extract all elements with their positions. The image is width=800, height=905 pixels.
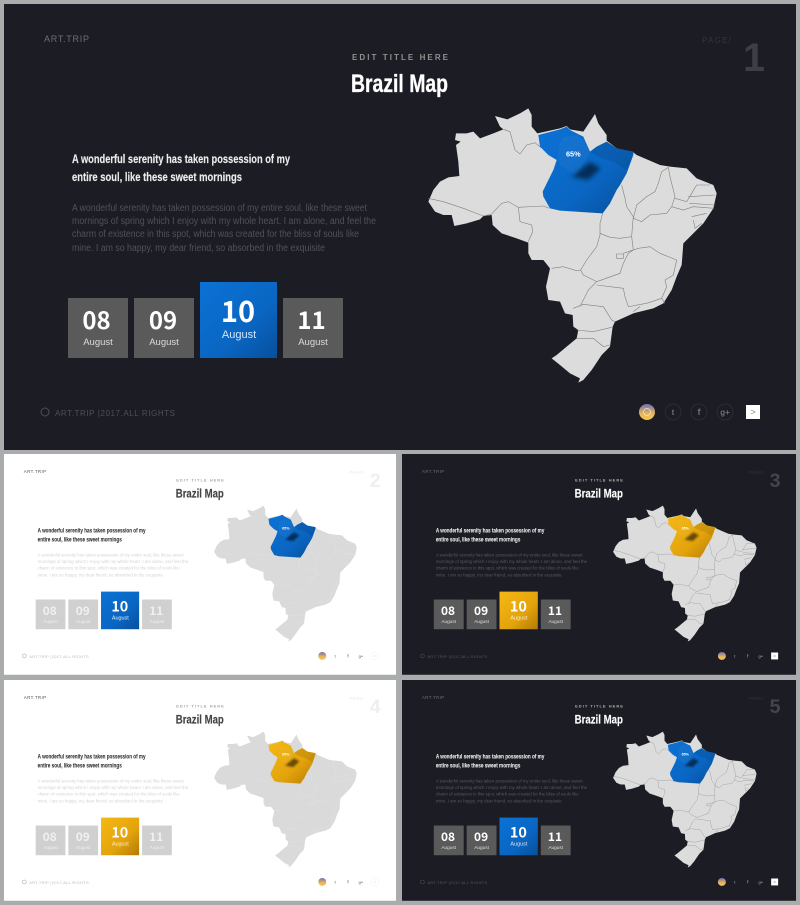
body text xyxy=(72,203,376,254)
subheading xyxy=(72,152,290,184)
subheading xyxy=(38,755,146,770)
title: Brazil Map xyxy=(176,713,224,727)
subheading: entire soul, like these sweet mornings xyxy=(436,538,521,544)
date box 10 highlighted: August xyxy=(112,615,129,621)
eyebrow: EDIT TITLE HERE xyxy=(575,478,623,483)
next button xyxy=(371,652,379,660)
brand label: ART.TRIP xyxy=(44,34,89,44)
subheading: entire soul, like these sweet mornings xyxy=(436,764,521,770)
body text: A wonderful serenity has taken possession of my entire soul, like these sweet xyxy=(436,552,583,558)
date box 10 highlighted xyxy=(200,282,277,358)
date box 08: August xyxy=(83,337,113,348)
social icons: t xyxy=(734,653,736,658)
body text xyxy=(436,552,587,578)
footer copyright: ART.TRIP |2017.ALL RIGHTS xyxy=(29,880,89,885)
date box 08: 08 xyxy=(441,602,455,619)
title: Brazil Map xyxy=(176,487,224,501)
social icons: f xyxy=(698,407,702,417)
body text: mornings of spring which I enjoy with my whole heart. I am alone, and feel the xyxy=(38,559,188,565)
date box 09: 09 xyxy=(474,602,488,619)
footer copyright: ART.TRIP |2017.ALL RIGHTS xyxy=(55,409,175,418)
date box 08 xyxy=(36,826,65,855)
map of Brazil: 65% xyxy=(282,752,290,756)
map of Brazil xyxy=(214,506,357,641)
social icons: t xyxy=(672,408,675,417)
date box 09: August xyxy=(474,845,490,850)
next button: > xyxy=(373,879,376,884)
panel: dark slide with blue highlight xyxy=(402,680,796,901)
social icons: t xyxy=(734,879,736,884)
brand label: ART.TRIP xyxy=(24,469,46,474)
body text: charm of existence in this spot, which was created for the bliss of souls like xyxy=(72,229,359,240)
map of Brazil xyxy=(214,732,357,867)
date box 09 xyxy=(467,826,497,855)
body text: charm of existence in this spot, which was created for the bliss of souls like xyxy=(436,565,579,571)
footer copyright: ART.TRIP |2017.ALL RIGHTS xyxy=(29,654,89,659)
panel: main dark slide xyxy=(4,4,796,450)
next button xyxy=(771,652,778,659)
date box 11: 11 xyxy=(548,828,562,845)
date box 09: August xyxy=(149,337,179,348)
body text: mine. I am so happy, my dear friend, so absorbed in the exquisite xyxy=(436,798,562,804)
date box 11 xyxy=(541,826,571,855)
social icons: g+ xyxy=(359,879,364,884)
date box 08: August xyxy=(441,845,457,850)
body text: charm of existence in this spot, which was created for the bliss of souls like xyxy=(38,791,180,797)
date box 09: August xyxy=(474,619,490,624)
date box 08: August xyxy=(43,619,59,624)
page label: PAGE/ xyxy=(749,695,765,700)
date box 09 xyxy=(467,600,497,629)
social icons: g+ xyxy=(758,879,764,884)
body text: charm of existence in this spot, which was created for the bliss of souls like xyxy=(436,791,579,797)
eyebrow: EDIT TITLE HERE xyxy=(352,53,449,62)
date box 09: August xyxy=(76,845,91,850)
subheading: A wonderful serenity has taken possession of my xyxy=(436,755,545,761)
social icons: f xyxy=(347,653,349,658)
body text: A wonderful serenity has taken possession of my entire soul, like these sweet xyxy=(38,552,184,558)
date box 10 highlighted: 10 xyxy=(221,289,255,331)
social icons: t xyxy=(334,879,336,884)
footer copyright: ART.TRIP |2017.ALL RIGHTS xyxy=(427,880,487,885)
footer copyright: ART.TRIP |2017.ALL RIGHTS xyxy=(427,654,487,659)
date box 08: 08 xyxy=(82,301,111,336)
subheading: A wonderful serenity has taken possession of my xyxy=(436,529,545,535)
subheading: entire soul, like these sweet mornings xyxy=(72,170,242,184)
social icons: g+ xyxy=(758,653,764,658)
social icons xyxy=(318,652,364,660)
subheading: entire soul, like these sweet mornings xyxy=(38,538,122,544)
page label: PAGE/ xyxy=(749,469,765,474)
date box 11: 11 xyxy=(149,828,163,845)
body text: A wonderful serenity has taken possession of my entire soul, like these sweet xyxy=(436,778,583,784)
date box 10 highlighted xyxy=(500,592,538,629)
social icons xyxy=(318,878,364,886)
date box 09 xyxy=(134,298,194,358)
body text: mine. I am so happy, my dear friend, so absorbed in the exquisite xyxy=(436,572,562,578)
date box 09: August xyxy=(76,619,91,624)
page label xyxy=(749,695,781,718)
date box 10 highlighted: 10 xyxy=(111,821,128,842)
date box 10 highlighted: August xyxy=(112,841,129,847)
body text: A wonderful serenity has taken possession of my entire soul, like these sweet xyxy=(72,203,367,214)
brand label: ART.TRIP xyxy=(422,469,444,474)
date box 11: August xyxy=(298,337,328,348)
date box 11 xyxy=(142,826,172,855)
date box 08 xyxy=(36,600,65,629)
subheading: A wonderful serenity has taken possession of my xyxy=(38,755,146,761)
page label: 5 xyxy=(770,696,781,718)
page label: PAGE/ xyxy=(350,469,365,474)
page label xyxy=(350,695,381,718)
subheading: A wonderful serenity has taken possession of my xyxy=(72,152,290,166)
next button xyxy=(371,878,379,886)
social icons: f xyxy=(747,879,749,884)
date box 11: August xyxy=(150,619,165,624)
date box 08 xyxy=(434,826,464,855)
date box 08: August xyxy=(43,845,59,850)
subheading xyxy=(38,529,146,544)
panel: dark slide with amber highlight xyxy=(402,454,796,675)
date box 10 highlighted xyxy=(500,818,538,855)
page label: 1 xyxy=(743,36,765,80)
next button: > xyxy=(373,653,376,658)
page label: 4 xyxy=(370,696,381,718)
body text xyxy=(38,778,188,804)
social icons: g+ xyxy=(359,653,364,658)
body text: mornings of spring which I enjoy with my whole heart. I am alone, and feel the xyxy=(436,559,587,565)
social icons: f xyxy=(747,653,749,658)
panel: light slide with amber highlight xyxy=(4,680,396,901)
date box 11: August xyxy=(150,845,165,850)
date box 10 highlighted: August xyxy=(222,329,256,341)
body text: mine. I am so happy, my dear friend, so absorbed in the exquisite xyxy=(38,572,163,578)
brand label: ART.TRIP xyxy=(24,695,46,700)
date box 11 xyxy=(541,600,571,629)
subheading: entire soul, like these sweet mornings xyxy=(38,764,122,770)
body text xyxy=(436,778,587,804)
page label xyxy=(702,36,765,80)
body text xyxy=(38,552,188,578)
date box 08: 08 xyxy=(441,828,455,845)
social icons xyxy=(718,878,764,886)
next button xyxy=(746,405,760,419)
body text: charm of existence in this spot, which was created for the bliss of souls like xyxy=(38,565,180,571)
next button: > xyxy=(750,407,756,417)
date box 10 highlighted: August xyxy=(510,615,528,621)
body text: mornings of spring which I enjoy with my whole heart. I am alone, and feel the xyxy=(38,785,188,791)
page label xyxy=(749,469,781,492)
date box 11: 11 xyxy=(149,602,163,619)
map of Brazil: 65% xyxy=(566,149,581,158)
social icons xyxy=(639,404,733,420)
date box 11: 11 xyxy=(548,602,562,619)
body text: A wonderful serenity has taken possession of my entire soul, like these sweet xyxy=(38,778,184,784)
date box 11: August xyxy=(548,619,564,624)
date box 11: August xyxy=(548,845,564,850)
title: Brazil Map xyxy=(575,487,623,501)
date box 11 xyxy=(283,298,343,358)
date box 09: 09 xyxy=(474,828,488,845)
date box 09: 09 xyxy=(76,828,90,845)
map of Brazil xyxy=(613,732,757,867)
map of Brazil: 65% xyxy=(282,526,290,530)
date box 10 highlighted xyxy=(101,818,139,855)
page label xyxy=(350,469,381,492)
date box 08: 08 xyxy=(43,602,57,619)
next button xyxy=(771,878,778,885)
map of Brazil xyxy=(428,108,717,383)
eyebrow: EDIT TITLE HERE xyxy=(176,704,224,709)
subheading xyxy=(436,755,545,770)
date box 10 highlighted xyxy=(101,592,139,629)
panel: light slide with blue highlight xyxy=(4,454,396,675)
social icons: f xyxy=(347,879,349,884)
subheading: A wonderful serenity has taken possession of my xyxy=(38,529,146,535)
date box 09 xyxy=(68,600,98,629)
date box 11: 11 xyxy=(297,301,326,336)
page label: 3 xyxy=(770,470,781,492)
social icons xyxy=(718,652,764,660)
eyebrow: EDIT TITLE HERE xyxy=(575,704,623,709)
page label: PAGE/ xyxy=(350,695,365,700)
date box 11 xyxy=(142,600,172,629)
body text: mine. I am so happy, my dear friend, so absorbed in the exquisite xyxy=(72,243,325,254)
subheading xyxy=(436,529,545,544)
date box 10 highlighted: August xyxy=(510,841,528,847)
brand label: ART.TRIP xyxy=(422,695,444,700)
social icons: g+ xyxy=(720,408,730,417)
date box 08: August xyxy=(441,619,457,624)
date box 09: 09 xyxy=(76,602,90,619)
map of Brazil xyxy=(613,506,757,641)
title: Brazil Map xyxy=(351,70,448,98)
page label: PAGE/ xyxy=(702,36,732,45)
date box 08 xyxy=(434,600,464,629)
map of Brazil: 65% xyxy=(682,526,690,530)
map of Brazil: 65% xyxy=(682,752,690,756)
next button: > xyxy=(773,653,776,658)
date box 10 highlighted: 10 xyxy=(510,595,527,616)
body text: mine. I am so happy, my dear friend, so absorbed in the exquisite xyxy=(38,798,163,804)
body text: mornings of spring which I enjoy with my whole heart. I am alone, and feel the xyxy=(72,216,376,227)
date box 10 highlighted: 10 xyxy=(111,595,128,616)
title: Brazil Map xyxy=(575,713,623,727)
date box 09: 09 xyxy=(149,301,177,336)
eyebrow: EDIT TITLE HERE xyxy=(176,478,224,483)
date box 10 highlighted: 10 xyxy=(510,821,527,842)
date box 08: 08 xyxy=(43,828,57,845)
body text: mornings of spring which I enjoy with my whole heart. I am alone, and feel the xyxy=(436,785,587,791)
date box 08 xyxy=(68,298,128,358)
page label: 2 xyxy=(370,470,381,492)
social icons: t xyxy=(334,653,336,658)
date box 09 xyxy=(68,826,98,855)
next button: > xyxy=(773,879,776,884)
